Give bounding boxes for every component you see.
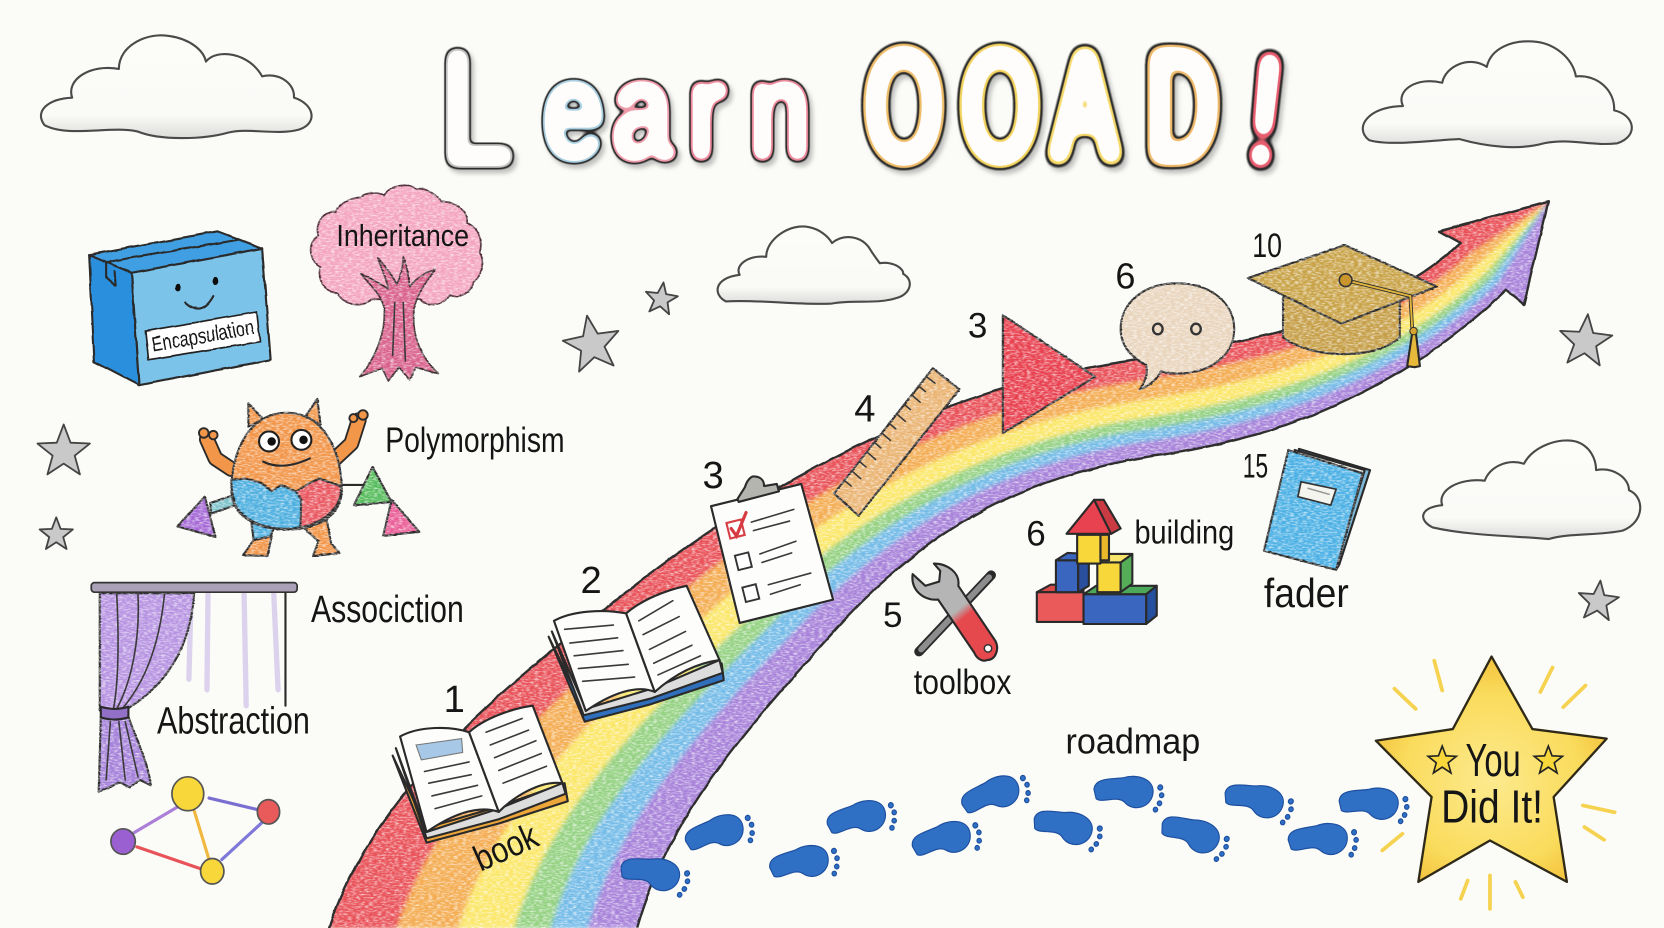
icon: inheritance tree (311, 185, 482, 381)
label: speech number: 6 (1115, 256, 1135, 297)
box face (175, 277, 218, 309)
footprint 9 (1158, 803, 1234, 866)
label: triangle number: 3 (968, 306, 987, 345)
icon: abstraction curtain (91, 583, 297, 792)
footprint 3 (769, 844, 840, 879)
cloud: middle (718, 226, 910, 304)
footprint 2 (684, 813, 755, 850)
icon: red triangle (1003, 315, 1095, 433)
label: Polymorphism: Polymorphism (385, 421, 565, 460)
label: toolbox: toolbox (914, 663, 1012, 702)
monster left hand (199, 428, 218, 439)
star: gray left lower (40, 517, 73, 549)
footprint 7 (1030, 797, 1107, 856)
callout: You Did It star (1376, 657, 1607, 882)
label: Abstraction: Abstraction (157, 699, 310, 742)
monster right arm (335, 420, 359, 458)
curtain rod (91, 583, 297, 592)
rainbow arrow path (328, 200, 1550, 928)
footprint 1 (618, 845, 694, 901)
footprint 6 (959, 773, 1032, 814)
label: cap number: 10 (1252, 227, 1282, 265)
label: step 1 number: 1 (444, 678, 465, 721)
cloud: top right (1363, 41, 1632, 147)
icon: open book step 2 (549, 586, 724, 722)
tree label: Inheritance (336, 218, 469, 253)
cloud: top left (41, 35, 312, 138)
icon: ruler step 4 (834, 368, 959, 516)
label: roadmap: roadmap (1065, 720, 1200, 761)
box label: Encapsulation (150, 316, 256, 357)
triangle: pink (383, 500, 419, 536)
icon: clipboard step 3 (711, 476, 833, 623)
star text line two: Did It! (1441, 780, 1543, 832)
footprint 4 (827, 801, 896, 833)
star: gray small top middle (643, 280, 679, 315)
icon: building blocks (1037, 500, 1157, 624)
label: fader: fader (1264, 570, 1349, 616)
cloud: lower right (1423, 440, 1640, 539)
label: tools number: 5 (883, 596, 902, 635)
label: blocks number: 6 (1026, 514, 1046, 553)
icon: polymorphism monster (177, 399, 419, 556)
label: step 2 number: 2 (580, 559, 602, 602)
star: gray left upper (37, 424, 90, 474)
icon: speech bubble (1121, 283, 1234, 389)
icon: class network diagram (111, 777, 280, 884)
small star left (1428, 746, 1456, 773)
label: Association: Associction (311, 588, 464, 631)
footprint 12 (1337, 778, 1412, 828)
label: notebook number: 15 (1243, 448, 1268, 486)
monster right hand (349, 410, 368, 422)
triangle: purple (177, 497, 215, 537)
icon: finish star rays (1382, 661, 1615, 909)
icon: toolbox wrench and screwdriver (912, 564, 997, 661)
footprints (618, 766, 1412, 901)
footprint 5 (911, 820, 982, 856)
icon: notebook (1264, 449, 1370, 570)
triangle: green (354, 467, 392, 505)
label: building: building (1134, 513, 1234, 550)
monster left arm (207, 439, 231, 469)
small star right (1534, 746, 1562, 773)
monster eyes and smile (259, 430, 311, 466)
footprint 10 (1221, 771, 1298, 829)
star: gray right (1557, 312, 1614, 366)
star text: You (1466, 734, 1521, 786)
speech bubble eyes (1153, 324, 1201, 334)
title: OOAD! (867, 20, 1287, 199)
label: step 4 number: 4 (854, 387, 876, 430)
star: gray large middle (559, 311, 624, 374)
title: L earn (441, 21, 809, 196)
icon: graduation cap (1248, 245, 1437, 367)
label: step 3 number: 3 (703, 454, 724, 497)
label: book: book (467, 815, 545, 879)
icon: book step 1 (393, 706, 568, 843)
icon: encapsulation box (89, 231, 271, 385)
title (441, 20, 1287, 199)
footprint 8 (1091, 766, 1167, 816)
footprint 11 (1286, 817, 1360, 861)
star: gray lower right (1576, 578, 1620, 621)
